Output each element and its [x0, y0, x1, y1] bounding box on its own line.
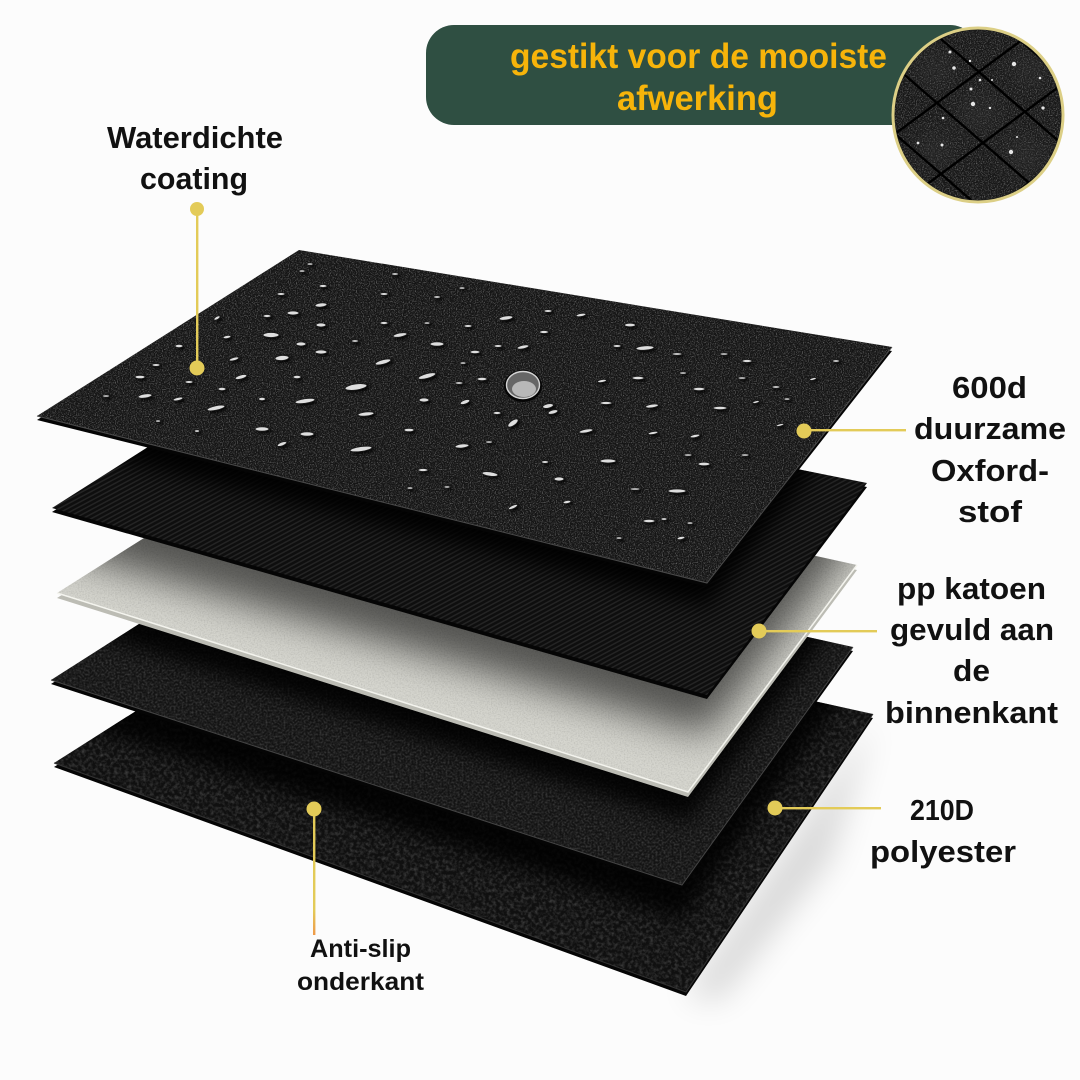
label: anti-slip onderkant	[297, 935, 425, 996]
leader line with dots	[190, 202, 204, 376]
layer: pp cotton filling sheet	[57, 538, 858, 797]
banner background	[426, 25, 978, 125]
label: 600d duurzame oxford-stof: duurzame	[914, 411, 1066, 446]
leader line with dot	[796, 424, 906, 438]
layer: 210D polyester sheet	[50, 624, 854, 886]
label: pp katoen gevuld aan de binnenkant: pp katoen	[897, 571, 1046, 606]
label: 600d duurzame oxford-stof: Oxford-	[931, 453, 1049, 488]
label: 600d duurzame oxford-stof: stof	[958, 494, 1023, 529]
label: waterdichte coating: Waterdichte	[107, 120, 283, 155]
label: 600d duurzame oxford-stof: 600d	[952, 370, 1027, 405]
label: pp katoen gevuld aan de binnenkant: gevuld aan	[890, 612, 1054, 647]
leader line with dot	[752, 624, 877, 638]
label: 210D polyester: 210D	[910, 795, 974, 827]
label: pp katoen gevuld aan de binnenkant: de	[953, 653, 990, 688]
layer: anti-slip bottom sheet	[54, 702, 874, 996]
callout: 210D polyester	[768, 795, 1016, 869]
callout: pp katoen	[752, 571, 1058, 730]
leader line with dot	[768, 800, 881, 816]
quilted fabric lens	[892, 26, 1064, 204]
label: waterdichte coating: coating	[140, 161, 248, 196]
oxford surface	[37, 250, 892, 583]
banner heading: afwerking	[617, 79, 778, 118]
banner heading	[510, 37, 887, 118]
callout: 600d oxford	[796, 370, 1066, 529]
label: 600d duurzame oxford-stof	[914, 370, 1066, 529]
callout: waterdichte coating	[107, 120, 283, 376]
floor shadow	[686, 720, 873, 1000]
label: 210D polyester: polyester	[870, 834, 1016, 869]
callout: anti-slip onderkant	[297, 802, 425, 996]
water drops	[102, 263, 840, 540]
label: 210D polyester	[870, 795, 1016, 869]
label: anti-slip onderkant: onderkant	[297, 968, 425, 996]
stitch seams	[896, 38, 1058, 200]
large central drop	[504, 370, 542, 402]
pillow highlights	[915, 52, 1050, 175]
fabric droplets	[917, 50, 1045, 154]
label: waterdichte coating	[107, 120, 283, 196]
layer: twill woven sheet	[52, 448, 867, 699]
leader line with dot	[306, 802, 322, 935]
banner heading: gestikt voor de mooiste	[510, 37, 887, 76]
banner: stitching	[426, 25, 1064, 204]
label: pp katoen gevuld aan de binnenkant	[885, 571, 1058, 730]
label: pp katoen gevuld aan de binnenkant: binnenkant	[885, 695, 1058, 730]
layer: top oxford sheet with water drops	[37, 250, 892, 587]
label: anti-slip onderkant: Anti-slip	[310, 935, 411, 963]
